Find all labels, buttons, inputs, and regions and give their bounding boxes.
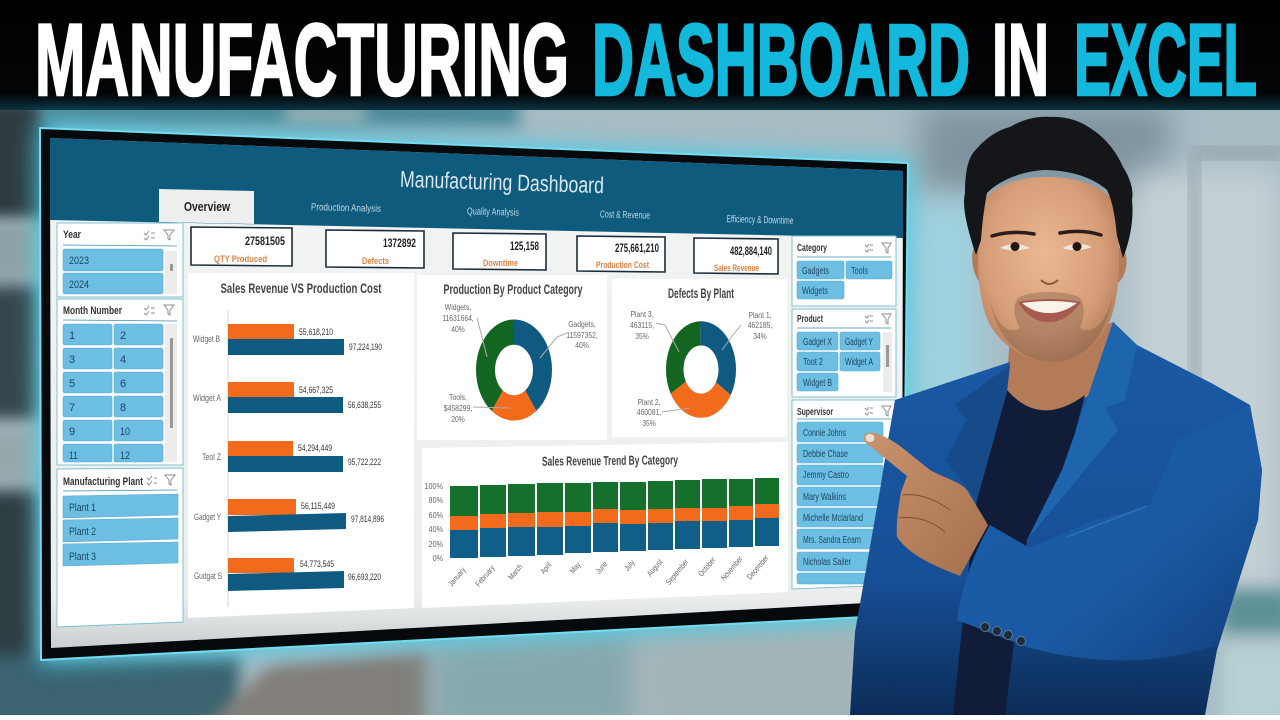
chart: defects by plant: Defects By Plant (668, 285, 734, 301)
chart: sales revenue vs production cost: 54,294,449 (298, 443, 332, 454)
title banner: DASHBOARD (592, 3, 970, 117)
title banner (0, 0, 1280, 117)
chart: production by product category: $458299, (444, 403, 472, 413)
slicer: product: Product (797, 314, 823, 325)
slicer: supervisor: Michelle Mclarland (803, 513, 863, 524)
chart: sales revenue vs production cost: 95,722,222 (348, 457, 381, 468)
chart: production by product category: Widgets, (445, 302, 471, 312)
monitor glow (36, 124, 912, 664)
slicer: month number: 11 (69, 450, 78, 462)
chart: defects by plant: Plant 2, (637, 397, 661, 407)
KPI: downtime: Downtime (483, 258, 518, 269)
navigation tabs: Cost & Revenue (600, 209, 650, 222)
slicer: product: Gadget Y (845, 337, 873, 348)
slicer: month number: 10 (120, 426, 130, 438)
hair (964, 117, 1133, 258)
chart: sales revenue vs production cost: 54,773,545 (300, 559, 334, 570)
breast pocket (1067, 506, 1147, 537)
chart: sales revenue trend by category (422, 442, 788, 608)
slicer: year: 2023 (69, 255, 89, 267)
chart: sales revenue vs production cost: Teol Z (202, 452, 221, 463)
chart: sales revenue trend by category: April (539, 560, 554, 576)
chart: production by product category: Gadgets, (568, 319, 596, 329)
chart: defects by plant: Plant 3, (630, 309, 654, 319)
slicer: category: Category (797, 243, 827, 254)
slicer: manufacturing plant: Manufacturing Plant (63, 476, 143, 488)
slicer: month number (57, 299, 183, 465)
chart: sales revenue vs production cost: Gudgat S (194, 571, 222, 582)
slicer: category: Gadgets (802, 266, 829, 277)
slicer: product (792, 309, 896, 397)
navigation tabs: Quality Analysis (467, 206, 519, 219)
face (978, 177, 1119, 362)
slicer: supervisor: Supervisor (797, 407, 833, 418)
navigation tabs: Production Analysis (311, 202, 381, 215)
chart: sales revenue vs production cost: 56,115,449 (301, 501, 335, 512)
title banner: IN (992, 3, 1049, 117)
presenter figure (850, 117, 1262, 715)
teeth (1022, 301, 1077, 313)
chart: sales revenue vs production cost: 56,638,255 (348, 400, 381, 411)
slicer: month number: 7 (69, 402, 75, 414)
chart: sales revenue trend by category: 80% (429, 495, 443, 505)
chart: sales revenue trend by category: December (745, 553, 771, 581)
KPI: QTY produced: QTY Produced (214, 254, 267, 265)
chart: sales revenue vs production cost: 54,667,325 (299, 385, 333, 396)
chart: sales revenue vs production cost (188, 273, 414, 618)
chart: production by product category: 11631664, (442, 313, 474, 323)
chart: defects by plant: Plant 1, (748, 310, 772, 320)
slicer: product: Widget A (845, 357, 873, 368)
monitor frame (40, 128, 908, 660)
chart: sales revenue trend by category: August (645, 558, 665, 578)
bottom white strip (0, 715, 1280, 720)
slicer: supervisor: Debbie Chase (803, 449, 848, 460)
chart: production by product category: 11597352, (566, 330, 598, 340)
slicer: manufacturing plant (57, 468, 183, 627)
chart: sales revenue trend by category: July (623, 558, 637, 573)
slicer: category: Tools (851, 266, 868, 277)
pointing hand (864, 433, 988, 576)
slicer: category: Widgets (802, 286, 828, 297)
slicer: month number: 1 (69, 330, 75, 342)
jacket torso (850, 322, 1262, 715)
KPI: downtime: 125,158 (510, 241, 539, 253)
chart: sales revenue vs production cost: 55,618,210 (299, 327, 333, 338)
KPI cards (191, 227, 778, 274)
slicer: supervisor: Connie Johns (803, 428, 846, 439)
KPI: QTY produced: 27581505 (245, 236, 285, 248)
slicer: year: Year (63, 229, 82, 241)
nose (1041, 280, 1058, 284)
chart: defects by plant (612, 279, 787, 437)
right lapel (1027, 322, 1137, 540)
dashboard screen (50, 138, 903, 648)
slicer: month number: 12 (120, 450, 130, 462)
knuckle lines (899, 495, 950, 532)
chart: defects by plant: 34% (753, 331, 767, 341)
chart: sales revenue trend by category: 60% (429, 510, 443, 520)
slicer: month number: 6 (120, 378, 126, 390)
chart: sales revenue vs production cost: Widget A (193, 393, 221, 404)
slicer: supervisor: Mrs. Sandra Eearn (803, 535, 861, 546)
chart: sales revenue vs production cost: 96,693,220 (348, 572, 381, 583)
chart: defects by plant: 35% (642, 418, 656, 428)
KPI: production cost: Production Cost (596, 260, 650, 271)
chart: sales revenue vs production cost: Sales Revenue VS Production Cost (220, 280, 382, 296)
chart: sales revenue trend by category: March (507, 563, 525, 582)
slicer: month number: 8 (120, 402, 126, 414)
chart: sales revenue trend by category: September (664, 557, 691, 587)
chart: sales revenue trend by category: November (719, 554, 745, 582)
dark t-shirt (953, 390, 1085, 715)
chart: sales revenue trend by category: January (447, 565, 468, 588)
title banner: MANUFACTURING (35, 3, 569, 117)
chart: sales revenue trend by category: 0% (433, 553, 443, 563)
chart: defects by plant: 462185, (748, 320, 772, 330)
chart: production by product category: 40% (451, 324, 465, 334)
sleeve buttons (980, 622, 1026, 646)
slicer: month number: 4 (120, 354, 126, 366)
chart: sales revenue trend by category: February (474, 563, 497, 589)
chart: sales revenue trend by category: Sales Revenue Trend By Category (542, 452, 679, 469)
chart: sales revenue vs production cost: Widget B (193, 334, 220, 345)
slicer: supervisor: Jemmy Castro (803, 470, 849, 481)
KPI: downtime (453, 233, 546, 270)
chart: sales revenue vs production cost: 97,814,896 (351, 514, 384, 525)
navigation tabs (159, 189, 794, 227)
KPI: QTY produced (191, 227, 292, 266)
slicer: month number: 3 (69, 354, 75, 366)
chart: sales revenue vs production cost: 97,224,190 (349, 342, 382, 353)
chart: production by product category: Production By Product Category (444, 281, 583, 297)
slicer: manufacturing plant: Plant 2 (69, 526, 96, 538)
chart: sales revenue trend by category: May (568, 560, 583, 575)
eyebrows (992, 231, 1101, 236)
chart: sales revenue trend by category: June (594, 560, 610, 576)
neck (1006, 322, 1113, 412)
KPI: defects: 1372892 (383, 238, 416, 250)
fingernail (866, 434, 874, 442)
slicer: month number: 9 (69, 426, 75, 438)
slicer: month number: Month Number (63, 305, 123, 317)
slicer: supervisor (792, 400, 896, 589)
chart: defects by plant: 35% (635, 331, 649, 341)
chart: production by product category: Tools, (449, 392, 467, 402)
slicer: product: Gadget X (803, 337, 832, 348)
KPI: sales revenue (694, 238, 778, 274)
ears (972, 245, 1127, 285)
chart: defects by plant: 460081, (637, 407, 661, 417)
KPI: production cost: 275,661,210 (615, 243, 659, 255)
navigation tabs: Efficiency & Downtime (726, 214, 794, 227)
chart: production by product category: 40% (575, 340, 589, 350)
slicer: supervisor: Mary Walkins (803, 492, 846, 503)
slicer: manufacturing plant: Plant 1 (69, 502, 96, 514)
smile (1018, 299, 1081, 322)
slicer: category (792, 236, 896, 306)
KPI: defects: Defects (362, 256, 389, 267)
slicer: year (57, 223, 183, 297)
navigation tabs: Overview (184, 199, 231, 214)
left lapel (945, 365, 1010, 500)
stubble (990, 292, 1113, 362)
chart: defects by plant: 463115, (630, 320, 654, 330)
eyes (1000, 244, 1092, 250)
slicer: supervisor: Nicholas Sailer (803, 557, 851, 568)
chart: production by product category (417, 275, 607, 440)
chart: sales revenue vs production cost: Gadget Y (194, 512, 221, 523)
header bar (50, 138, 903, 238)
slicer: manufacturing plant: Plant 3 (69, 551, 96, 563)
KPI: sales revenue: 482,884,140 (730, 246, 772, 258)
slicer: product: Toot 2 (803, 357, 823, 368)
KPI: production cost (577, 236, 665, 272)
dashboard title: Manufacturing Dashboard (400, 166, 604, 198)
slicer: month number: 5 (69, 378, 75, 390)
chart: sales revenue trend by category: 100% (425, 481, 443, 491)
slicer: month number: 2 (120, 330, 126, 342)
chart: production by product category: 20% (451, 414, 465, 424)
KPI: defects (326, 230, 424, 268)
slicer: product: Widget B (803, 378, 832, 389)
KPI: sales revenue: Sales Revenue (714, 263, 759, 274)
chart: sales revenue trend by category: October (697, 555, 718, 578)
jacket sleeve (957, 405, 1262, 660)
chart: sales revenue trend by category: 20% (429, 539, 443, 549)
slicer: year: 2024 (69, 279, 89, 291)
chart: sales revenue trend by category: 40% (429, 524, 443, 534)
